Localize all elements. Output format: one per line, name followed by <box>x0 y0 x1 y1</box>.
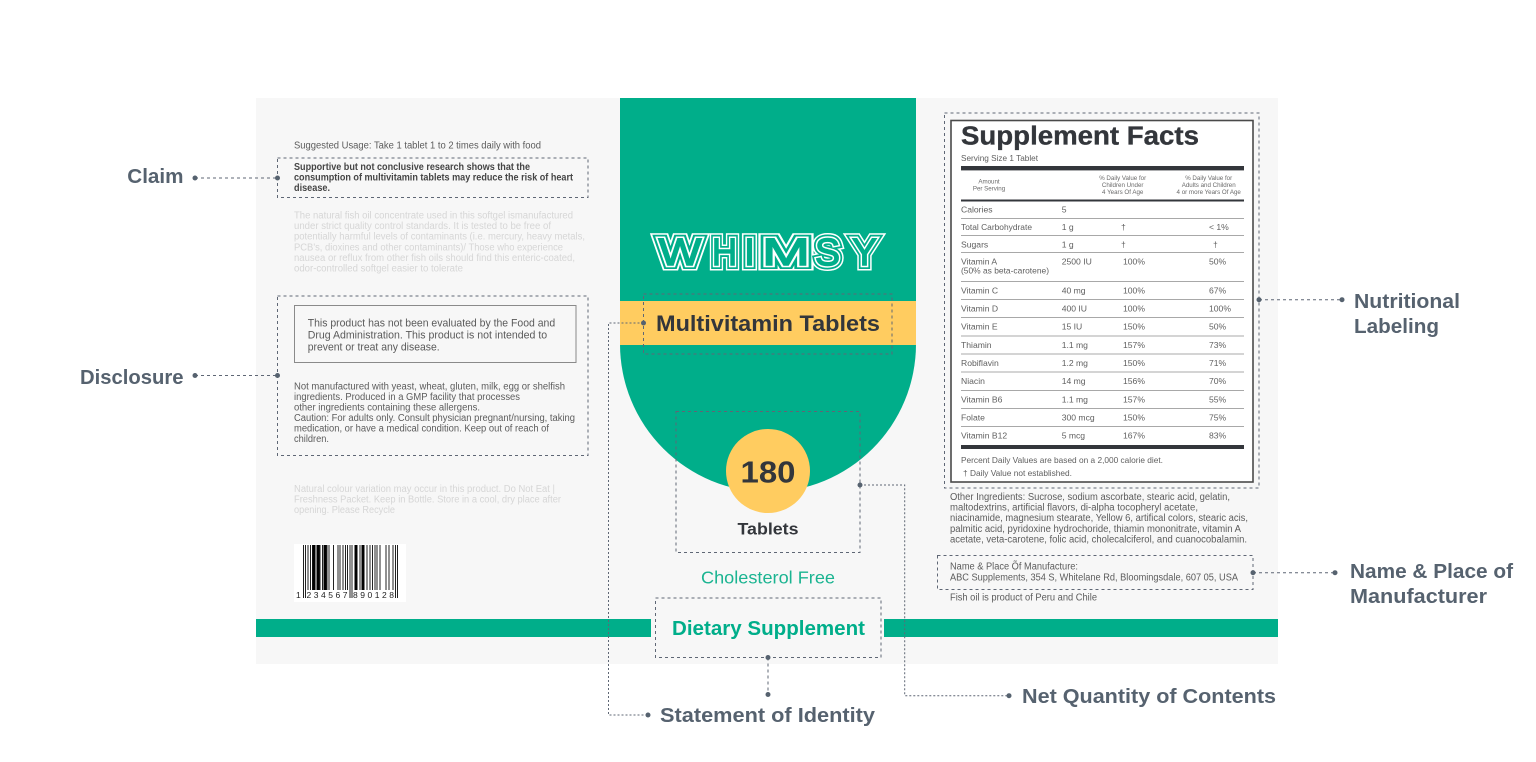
nutrient rows: Sugars <box>961 240 988 250</box>
nutrient rows: 300 mcg <box>1062 412 1095 422</box>
nutrient rows: 1.1 mg <box>1062 394 1088 404</box>
quantity unit: Tablets <box>738 520 798 538</box>
callout: claim: Claim <box>127 165 184 188</box>
callout: disclosure: Disclosure <box>80 366 184 389</box>
callout box: manufacturer <box>938 556 1253 590</box>
nutrient rows: † <box>1121 240 1126 250</box>
nutrient rows: 157% <box>1123 394 1145 404</box>
FDA disclaimer box: prevent or treat any disease. <box>308 342 440 354</box>
callout: disclosure <box>80 366 280 389</box>
storage note: Freshness Packet. Keep in Bottle. Store in a cool, dry place after <box>294 495 562 506</box>
other ingredients: maltodextrins, artificial flavors, di-alpha tocopheryl acetate, <box>950 503 1198 514</box>
claim text: consumption of multivitamin tablets may reduce the risk of heart <box>294 173 574 184</box>
nutrient rows: 100% <box>1123 256 1145 266</box>
callout: name and place of manufacturer <box>1250 560 1513 608</box>
column headers: 4 or more Years Of Age <box>1177 189 1241 196</box>
fish oil note: potentially harmful levels of contaminants (i.e. mercury, heavy metals, <box>294 232 585 243</box>
callout: nutritional labeling: Nutritional <box>1354 290 1460 313</box>
brand logo: I <box>744 232 755 274</box>
nutrient rows: 1.1 mg <box>1062 340 1088 350</box>
column headers: % Daily Value for <box>1099 175 1146 182</box>
callout box: product name <box>644 294 892 354</box>
nutrient rows: 14 mg <box>1062 376 1086 386</box>
brand logo: H <box>712 232 737 274</box>
manufacturer details: ABC Supplements, 354 S, Whitelane Rd, Bloomingsdale, 607 05, USA <box>950 572 1238 583</box>
brand logo: H <box>712 232 737 274</box>
nutrition footnotes: † Daily Value not established. <box>963 468 1072 478</box>
callout: nutritional labeling: Labeling <box>1354 315 1439 338</box>
callout: name and place of manufacturer: Manufacturer <box>1350 585 1487 608</box>
brand logo <box>658 232 877 274</box>
nutrient rows: Folate <box>961 412 985 422</box>
brand logo: H <box>712 232 737 274</box>
column headers: 4 Years Of Age <box>1102 189 1144 196</box>
nutrient rows: Calories <box>961 205 993 215</box>
serving size: Serving Size 1 Tablet <box>961 153 1039 163</box>
FDA disclaimer box: Drug Administration. This product is not intended to <box>308 330 547 342</box>
quantity badge <box>726 429 810 513</box>
brand logo: M <box>762 232 810 274</box>
claim text: disease. <box>294 183 330 194</box>
nutrient rows: 2500 IU <box>1062 256 1092 266</box>
callout: net quantity of contents <box>858 482 1276 708</box>
brand logo: W <box>658 232 702 274</box>
dietary supplement text: Dietary Supplement <box>672 618 865 640</box>
nutrient rows: † <box>1121 222 1126 232</box>
green front label shape <box>620 98 916 492</box>
allergen and caution text: children. <box>294 434 329 445</box>
nutrient rows: Vitamin D <box>961 304 998 314</box>
nutrition title: Supplement Facts <box>961 122 1199 150</box>
other ingredients: Other Ingredients: Sucrose, sodium ascorbate, stearic acid, gelatin, <box>950 492 1230 503</box>
column headers: Per Serving <box>973 186 1006 192</box>
barcode <box>294 544 406 602</box>
allergen and caution text <box>294 381 575 445</box>
quantity badge: 180 <box>740 454 796 490</box>
callout box: nutritional labeling <box>944 113 1259 488</box>
nutrition facts panel <box>951 120 1253 482</box>
fish oil note: PCB's, dioxines and other contaminants)/ Those who experience <box>294 242 563 253</box>
brand logo: S <box>815 232 840 274</box>
brand logo: W <box>658 232 702 274</box>
nutrition footnotes: Percent Daily Values are based on a 2,000 calorie diet. <box>961 455 1163 465</box>
column headers: Adults and Children <box>1182 182 1236 189</box>
fish oil note: nausea or reflux from other fish oils should find this enteric-coated, <box>294 253 575 264</box>
nutrient rows: 1.2 mg <box>1062 358 1088 368</box>
nutrient rows: † <box>1213 240 1218 250</box>
brand logo: S <box>815 232 840 274</box>
fish oil note: under strict quality control standards. It is tested to be free of <box>294 221 551 232</box>
nutrient rows: 1 g <box>1062 240 1074 250</box>
column headers: Amount <box>978 178 1000 186</box>
allergen and caution text: Not manufactured with yeast, wheat, gluten, milk, egg or shelfish <box>294 381 565 392</box>
manufacturer details: Name & Place Õf Manufacture: <box>950 562 1078 573</box>
nutrient rows: 71% <box>1209 358 1227 368</box>
other ingredients <box>950 492 1248 545</box>
nutrient rows: 73% <box>1209 340 1227 350</box>
nutrient rows: Vitamin C <box>961 285 998 295</box>
nutrient rows: 156% <box>1123 376 1145 386</box>
nutrition footnotes <box>961 455 1163 478</box>
brand logo: M <box>762 232 810 274</box>
other ingredients: niacinamide, magnesium stearate, Yellow 6, artifical colors, stearic acis, <box>950 513 1248 524</box>
brand logo: Y <box>852 232 877 274</box>
nutrient rows: 400 IU <box>1062 304 1087 314</box>
origin note: Fish oil is product of Peru and Chile <box>950 593 1097 604</box>
barcode: 1 <box>296 590 301 600</box>
product name: Multivitamin Tablets <box>656 311 880 336</box>
yellow product band <box>620 301 916 345</box>
nutrient rows: 55% <box>1209 394 1227 404</box>
fish oil note: The natural fish oil concentrate used in this softgel ismanufactured <box>294 211 573 222</box>
fish oil note: odor-controlled softgel easier to tolerate <box>294 263 463 274</box>
claim text: Supportive but not conclusive research shows that the <box>294 162 530 173</box>
brand logo: I <box>744 232 755 274</box>
callout box: disclosure <box>278 296 588 456</box>
allergen and caution text: other ingredients containing these allergens. <box>294 402 480 413</box>
callout: claim <box>127 165 280 188</box>
brand logo: Y <box>852 232 877 274</box>
callout: name and place of manufacturer: Name & Place of <box>1350 560 1513 583</box>
nutrient rows: 157% <box>1123 340 1145 350</box>
callout box: net quantity <box>676 412 860 552</box>
column headers: Children Under <box>1102 182 1144 189</box>
nutrient rows: 150% <box>1123 322 1145 332</box>
callout box: claim <box>278 158 588 198</box>
barcode: 890128 <box>353 590 394 600</box>
nutrient rows: Vitamin B6 <box>961 394 1003 404</box>
nutrition thick rules <box>961 166 1244 449</box>
fish oil note <box>294 211 585 274</box>
callout: nutritional labeling <box>1256 290 1460 338</box>
nutrient rows: (50% as beta-carotene) <box>961 266 1049 276</box>
storage note <box>294 484 562 516</box>
brand logo: I <box>744 232 755 274</box>
nutrient rows: 150% <box>1123 412 1145 422</box>
brand logo: M <box>762 232 810 274</box>
nutrient rows: 167% <box>1123 430 1145 440</box>
nutrient rows: 1 g <box>1062 222 1074 232</box>
allergen and caution text: Caution: For adults only. Consult physician pregnant/nursing, taking <box>294 413 575 424</box>
storage note: opening. Please Recycle <box>294 505 395 516</box>
cholesterol free text: Cholesterol Free <box>701 568 835 588</box>
storage note: Natural colour variation may occur in this product. Do Not Eat | <box>294 484 555 495</box>
callout box: dietary supplement <box>656 598 881 658</box>
nutrient rows: 70% <box>1209 376 1227 386</box>
other ingredients: acetate, veta-carotene, folic acid, cholecalciferol, and cuanocobalamin. <box>950 534 1247 545</box>
nutrient rows: Niacin <box>961 376 985 386</box>
manufacturer details <box>950 562 1238 583</box>
nutrient rows: 100% <box>1123 285 1145 295</box>
nutrient rows <box>961 205 1231 440</box>
nutrient rows: Vitamin B12 <box>961 430 1007 440</box>
nutrient rows: Total Carbohydrate <box>961 222 1032 232</box>
allergen and caution text: ingredients. Produced in a GMP facility that processes <box>294 392 520 403</box>
nutrient rows: 100% <box>1209 304 1231 314</box>
nutrient rows: Robiflavin <box>961 358 999 368</box>
brand logo: M <box>762 232 810 274</box>
nutrient rows: 83% <box>1209 430 1227 440</box>
nutrient rows: 50% <box>1209 256 1227 266</box>
label panel background <box>256 98 1278 664</box>
brand logo: Y <box>852 232 877 274</box>
other ingredients: palmitic acid, pyridoxine hydrochoride, thiamin mononitrate, vitamin A <box>950 524 1241 535</box>
FDA disclaimer box <box>294 306 576 362</box>
brand logo: Y <box>852 232 877 274</box>
brand logo: S <box>815 232 840 274</box>
column headers <box>973 175 1241 196</box>
column headers: % Daily Value for <box>1185 175 1232 182</box>
allergen and caution text: medication, or have a medical condition. Keep out of reach of <box>294 424 549 434</box>
nutrient rows: Vitamin E <box>961 322 998 332</box>
callout: statement of identity <box>608 320 876 727</box>
nutrient rows: Thiamin <box>961 340 992 350</box>
brand logo: S <box>815 232 840 274</box>
nutrient rows: 100% <box>1123 304 1145 314</box>
brand logo: W <box>658 232 702 274</box>
nutrient rows: < 1% <box>1209 222 1229 232</box>
nutrient rows: 50% <box>1209 322 1227 332</box>
nutrient rows: 5 mcg <box>1062 430 1085 440</box>
nutrient rows: 67% <box>1209 285 1227 295</box>
row dividers <box>961 218 1244 426</box>
brand logo: I <box>744 232 755 274</box>
nutrient rows: 15 IU <box>1062 322 1082 332</box>
brand logo: W <box>658 232 702 274</box>
nutrient rows: 150% <box>1123 358 1145 368</box>
nutrient rows: Vitamin A <box>961 256 997 266</box>
FDA disclaimer box: This product has not been evaluated by the Food and <box>308 318 555 330</box>
barcode: 234567 <box>306 590 348 600</box>
green bottom stripe <box>256 619 1278 637</box>
nutrient rows: 75% <box>1209 412 1227 422</box>
brand logo: H <box>712 232 737 274</box>
claim text <box>294 162 574 194</box>
callout: statement of identity: Statement of Identity <box>660 704 876 727</box>
nutrient rows: 40 mg <box>1062 285 1086 295</box>
callout: net quantity of contents: Net Quantity of Contents <box>1022 685 1276 708</box>
left panel: suggested usage: Suggested Usage: Take 1 tablet 1 to 2 times daily with food <box>294 141 541 152</box>
nutrient rows: 5 <box>1062 205 1067 215</box>
